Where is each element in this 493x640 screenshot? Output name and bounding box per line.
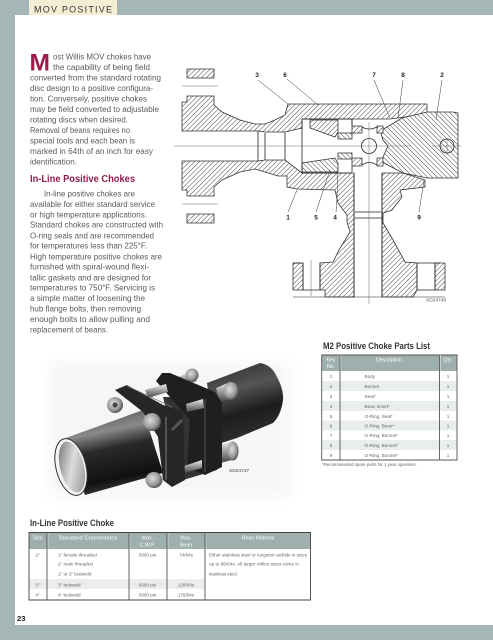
product photo: in-line positive choke xyxy=(49,362,290,499)
parts list table: O-Ring, Bean* xyxy=(364,423,394,428)
section tab: MOV POSITIVE: MOV POSITIVE xyxy=(34,4,112,14)
intro text block with drop cap xyxy=(30,50,161,166)
callout numbers and leaders: 7 xyxy=(372,72,376,79)
parts list footnote: *Recommended spare parts for 1 year operation. xyxy=(322,462,417,467)
body text: in-line positive chokes: for temperatures less than 225°F. xyxy=(30,241,147,251)
parts list title: M2 Positive Choke Parts List xyxy=(323,340,430,351)
parts list table: 5 xyxy=(330,414,333,419)
body text: in-line positive chokes: In-line positive chokes are xyxy=(44,188,135,198)
in-line positive choke table: 1" or 2" buttweld xyxy=(58,572,92,577)
parts list table: 4 xyxy=(330,404,333,409)
parts list table: 1 xyxy=(447,414,450,419)
left flange pieces xyxy=(182,69,458,297)
left pipe xyxy=(63,410,163,495)
front bolts between plates xyxy=(145,384,168,398)
pipe opening xyxy=(49,435,93,499)
in-line positive choke table: Size xyxy=(32,536,43,542)
parts list table: Description xyxy=(376,358,402,364)
parts list table: 1 xyxy=(447,384,450,389)
intro text block with drop cap: the capability of being field xyxy=(53,62,150,72)
in-line positive choke table: up to 66/64s. All larger orifice sizes come in xyxy=(209,562,299,567)
intro text block with drop cap: tion. Conversely, positive chokes xyxy=(30,94,147,104)
in-line positive choke table: 74/64s xyxy=(179,552,194,557)
in-line positive choke table: Either stainless steel or tungsten carbide in sizes xyxy=(209,552,308,557)
parts list table: 1 xyxy=(447,404,450,409)
parts list table: 1 xyxy=(447,423,450,428)
seat upper xyxy=(310,120,338,137)
bean rings xyxy=(338,133,352,139)
body text: in-line positive chokes: enough bolts to allow pulling and xyxy=(30,314,150,324)
callout numbers and leaders: 6 xyxy=(283,72,287,79)
body text: in-line positive chokes: O-ring seals and are recommended xyxy=(30,230,154,240)
drawing number: SD24748 xyxy=(426,298,447,302)
body text: in-line positive chokes: tallic gaskets and are designed for xyxy=(30,272,151,282)
in-line positive choke table: stainless steel. xyxy=(209,572,238,577)
intro text block with drop cap: identification. xyxy=(30,156,77,166)
body text: in-line positive chokes: hub flange bolts, then removing xyxy=(30,304,141,314)
in-line positive choke table: 4" buttweld xyxy=(58,593,81,598)
callout numbers and leaders: 5 xyxy=(314,214,318,222)
intro text block with drop cap: disc design to a positive configura- xyxy=(30,83,153,93)
parts list table: 1 xyxy=(447,433,450,438)
section tab: MOV POSITIVE xyxy=(29,0,117,15)
in-line positive choke table: 128/64s xyxy=(178,582,195,587)
parts list table: 6 xyxy=(330,423,333,428)
table title: In-Line Positive Choke: In-Line Positive Choke xyxy=(30,517,114,528)
parts list table: 7 xyxy=(330,433,333,438)
parts list table: 1 xyxy=(330,374,333,379)
in-line positive choke table: 3" buttweld xyxy=(58,582,81,587)
body text: in-line positive chokes: Standard chokes are constructed with xyxy=(30,220,163,230)
callout numbers and leaders xyxy=(255,72,444,222)
parts list table: O-Ring, Bonnet* xyxy=(364,433,398,438)
in-line positive choke table: 4" xyxy=(35,593,40,598)
flange ends xyxy=(293,263,303,290)
right pipe xyxy=(207,363,283,445)
parts list table: 1 xyxy=(447,443,450,448)
page number: 23 xyxy=(17,614,25,623)
intro text block with drop cap: may be field converted to adjustable xyxy=(30,104,159,114)
lower body and stem, left side xyxy=(182,160,354,297)
parts list table: Bean Insert* xyxy=(364,404,390,409)
in-line positive choke table: C.W.P. xyxy=(140,542,155,548)
front head bolts xyxy=(107,397,123,413)
body text: in-line positive chokes: High temperature positive chokes are xyxy=(30,251,162,261)
seat lower xyxy=(302,158,338,172)
callout numbers and leaders: 9 xyxy=(417,214,421,222)
callout numbers and leaders: 3 xyxy=(255,72,259,79)
front clamp plate xyxy=(115,385,185,487)
in-line positive choke table: Standard Connections xyxy=(58,536,118,542)
parts list table: 1 xyxy=(447,453,450,458)
intro text block with drop cap: rotating discs when desired. xyxy=(30,114,128,124)
parts list table: O-Ring, Bonnet* xyxy=(364,443,398,448)
callout numbers and leaders: 4 xyxy=(333,214,337,222)
callout numbers and leaders: 8 xyxy=(401,72,405,79)
body text: in-line positive chokes: furnished with spiral-wound flexi- xyxy=(30,262,149,272)
heading: In-Line Positive Chokes: In-Line Positive Chokes xyxy=(30,174,135,185)
in-line positive choke table: 5000 psi xyxy=(139,593,156,598)
in-line positive choke table: 3" xyxy=(35,582,40,587)
seat chamber outline, ball and centre lines xyxy=(258,119,454,297)
hub between the clamp plates xyxy=(163,397,217,480)
in-line positive choke table: 2" xyxy=(35,552,40,557)
intro text block with drop cap: marked in 64th of an inch for easy xyxy=(30,146,154,156)
callout numbers and leaders: 2 xyxy=(440,72,444,79)
in-line positive choke table: 6000 psi xyxy=(139,582,156,587)
in-line positive choke table: Max. xyxy=(142,536,153,542)
intro text block with drop cap: Removal of beans requires no xyxy=(30,125,130,135)
parts list table: Bonnet xyxy=(364,384,380,389)
parts list table: 1 xyxy=(447,394,450,399)
body text: in-line positive chokes: temperatures to 750°F. Servicing is xyxy=(30,283,155,293)
parts list table: Seat* xyxy=(364,394,376,399)
in-line positive choke table: Bean xyxy=(180,542,192,548)
parts list table: No. xyxy=(327,364,335,370)
lower body right side xyxy=(382,173,425,297)
drop cap M: M xyxy=(30,50,50,76)
body text: in-line positive chokes xyxy=(30,188,163,335)
in-line positive choke table: 176/64s xyxy=(178,593,195,598)
rear clamp plate xyxy=(156,373,222,475)
body text: in-line positive chokes: a simple matter of loosening the xyxy=(30,293,145,303)
in-line positive choke table: 1" female threaded xyxy=(58,552,97,557)
body text: in-line positive chokes: or high temperature applications. xyxy=(30,209,147,219)
parts list table: Qty. xyxy=(443,358,453,364)
intro text block with drop cap: converted from the standard rotating xyxy=(30,72,161,82)
parts list table: O-Ring, Seat* xyxy=(364,414,393,419)
cross-section diagram of positive choke xyxy=(174,69,461,304)
photo number: SD24747 xyxy=(229,468,250,473)
in-line positive choke table: 5000 psi xyxy=(139,552,156,557)
intro text block with drop cap: special tools and each bean is xyxy=(30,136,135,146)
upper body xyxy=(182,96,427,132)
cage pieces xyxy=(352,126,362,133)
intro text block with drop cap: ost Willis MOV chokes have xyxy=(53,52,151,62)
parts list table: Key xyxy=(327,358,336,364)
in-line positive choke table: 2" male threaded xyxy=(58,562,93,567)
callout numbers and leaders: 1 xyxy=(286,214,290,222)
in-line positive choke table: Max. xyxy=(180,536,192,542)
parts list table: 2 xyxy=(330,384,333,389)
parts list table: 3 xyxy=(330,394,333,399)
parts list table: 9 xyxy=(330,453,333,458)
parts list table xyxy=(322,355,457,460)
parts list table: O-Ring, Bonnet* xyxy=(364,453,398,458)
rear head bolts with shanks xyxy=(218,441,236,463)
body text: in-line positive chokes: replacement of beans. xyxy=(30,325,108,335)
in-line positive choke table xyxy=(29,532,310,600)
parts list table: 8 xyxy=(330,443,333,448)
in-line positive choke table: Bean Material xyxy=(242,536,274,542)
parts list table: 1 xyxy=(447,374,450,379)
body text: in-line positive chokes: available for either standard service xyxy=(30,199,155,209)
parts list table: Body xyxy=(364,374,376,379)
bonnet xyxy=(380,112,458,178)
